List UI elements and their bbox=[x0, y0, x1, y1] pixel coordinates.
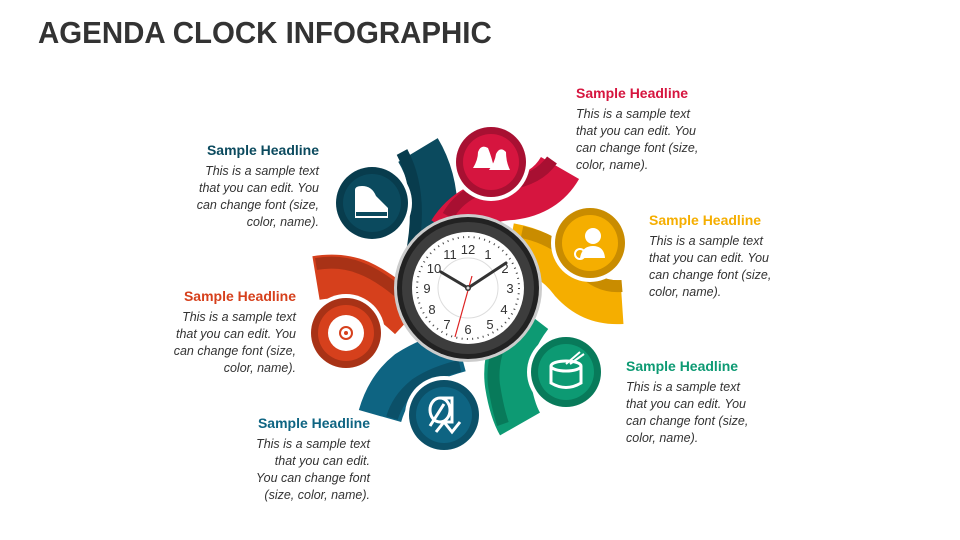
text: orange: that you can edit. You bbox=[176, 327, 296, 341]
icon circle: disc bbox=[307, 294, 385, 372]
text: teal: color, name). bbox=[247, 215, 319, 229]
text: green bbox=[626, 358, 748, 445]
text: green: color, name). bbox=[626, 431, 698, 445]
text: crimson bbox=[576, 85, 698, 172]
text: crimson: color, name). bbox=[576, 158, 648, 172]
text: green: that you can edit. You bbox=[626, 397, 746, 411]
text: yellow: color, name). bbox=[649, 285, 721, 299]
title: AGENDA CLOCK INFOGRAPHIC bbox=[38, 15, 492, 50]
text: teal: that you can edit. You bbox=[199, 181, 319, 195]
text: crimson: that you can edit. You bbox=[576, 124, 696, 138]
clock: 3 bbox=[506, 281, 514, 296]
text: teal: can change font (size, bbox=[197, 198, 319, 212]
text: blue: Sample Headline bbox=[258, 415, 370, 431]
clock: 10 bbox=[427, 261, 441, 276]
text: orange: can change font (size, bbox=[174, 344, 296, 358]
text: blue: This is a sample text bbox=[256, 437, 370, 451]
clock: 1 bbox=[484, 247, 492, 262]
icon circle: drum bbox=[527, 333, 605, 411]
arm: yellow bbox=[510, 232, 622, 302]
text: orange: color, name). bbox=[224, 361, 296, 375]
text: teal: This is a sample text bbox=[205, 164, 319, 178]
text: teal: Sample Headline bbox=[207, 142, 319, 158]
arm: crimson bbox=[448, 160, 560, 232]
text: yellow: This is a sample text bbox=[649, 234, 763, 248]
text: yellow: can change font (size, bbox=[649, 268, 771, 282]
clock: 2 bbox=[501, 261, 509, 276]
text: yellow bbox=[649, 212, 771, 299]
text: yellow: that you can edit. You bbox=[649, 251, 769, 265]
text: teal bbox=[197, 142, 320, 229]
arm: orange bbox=[316, 263, 410, 318]
arm: blue bbox=[380, 350, 460, 418]
text: crimson: can change font (size, bbox=[576, 141, 698, 155]
text: green: This is a sample text bbox=[626, 380, 740, 394]
text: green: can change font (size, bbox=[626, 414, 748, 428]
clock: 11 bbox=[443, 247, 457, 262]
icon circle: bells bbox=[452, 123, 530, 201]
text: blue: You can change font bbox=[256, 471, 370, 485]
text: orange bbox=[174, 288, 296, 375]
icon circle: headset bbox=[551, 204, 629, 282]
text: green: Sample Headline bbox=[626, 358, 738, 374]
icon circle: piano bbox=[332, 163, 412, 243]
arm: green bbox=[493, 315, 530, 424]
text: blue: that you can edit. bbox=[275, 454, 370, 468]
text: blue: (size, color, name). bbox=[264, 488, 370, 502]
clock: 8 bbox=[428, 302, 436, 317]
text: yellow: Sample Headline bbox=[649, 212, 761, 228]
text: crimson: Sample Headline bbox=[576, 85, 688, 101]
clock bbox=[394, 214, 542, 362]
arm: teal bbox=[402, 150, 435, 262]
clock: 6 bbox=[464, 322, 472, 337]
clock: 4 bbox=[500, 302, 508, 317]
clock: 7 bbox=[443, 317, 451, 332]
icon circle: bass drum bbox=[405, 376, 483, 454]
text: orange: Sample Headline bbox=[184, 288, 296, 304]
text: orange: This is a sample text bbox=[182, 310, 296, 324]
clock: 5 bbox=[486, 317, 494, 332]
clock: 9 bbox=[423, 281, 431, 296]
text: crimson: This is a sample text bbox=[576, 107, 690, 121]
clock: 12 bbox=[461, 242, 475, 257]
text: blue bbox=[256, 415, 370, 502]
